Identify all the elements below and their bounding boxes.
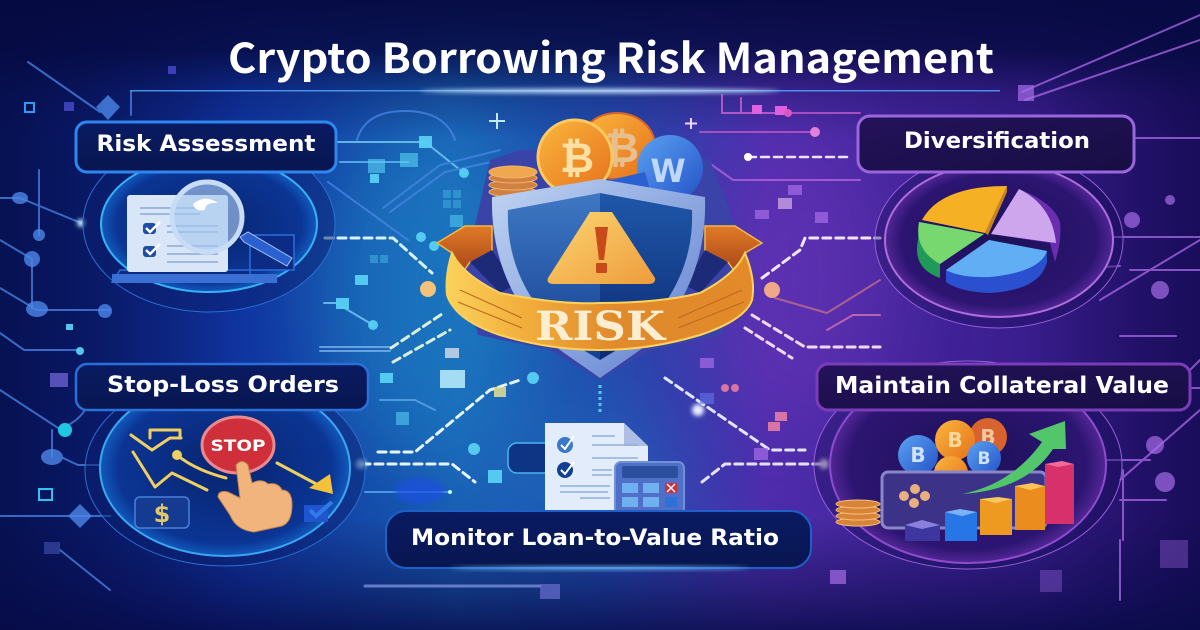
label: monitor loan-to-value ratio: [386, 511, 811, 570]
coins: ₿: [560, 133, 594, 182]
label: maintain collateral value: Maintain Collateral Value: [835, 373, 1169, 399]
panel: stop-loss orders: [76, 364, 368, 566]
icon: checklist and magnifier: [112, 182, 294, 283]
icon: stop button with hand and falling chart: [131, 417, 333, 532]
disc: stop-loss: [85, 374, 365, 566]
panel: risk assessment: [76, 122, 336, 312]
label: risk assessment: Risk Assessment: [96, 132, 316, 157]
icon: coins wallet and rising bars: B: [910, 443, 926, 467]
icon: coins wallet and rising bars: B: [978, 449, 990, 469]
disc: diversification: [875, 152, 1123, 328]
title underline glow: [130, 88, 1000, 94]
label: diversification: Diversification: [904, 129, 1090, 154]
label: stop-loss orders: [76, 364, 368, 410]
ribbon tails: [437, 226, 762, 293]
central emblem: risk shield: [437, 113, 762, 380]
icon: pie chart: [917, 186, 1060, 293]
icon: document and calculator: [508, 423, 684, 514]
ribbon band: [447, 253, 753, 350]
disc: risk assessment: [83, 136, 335, 312]
label: maintain collateral value: [817, 364, 1190, 410]
disc: maintain collateral: [814, 361, 1122, 569]
backing plate: [462, 150, 745, 380]
panel: diversification: [858, 116, 1134, 328]
label: risk assessment: [76, 122, 336, 172]
panel: monitor loan-to-value: [386, 423, 811, 570]
icon: stop button with hand and falling chart: $: [154, 500, 170, 528]
label: stop-loss orders: Stop-Loss Orders: [107, 373, 339, 398]
shield: [492, 179, 705, 378]
icon: coins wallet and rising bars: [836, 418, 1074, 541]
title: Crypto Borrowing Risk Management: [228, 25, 994, 85]
label: diversification: [858, 116, 1134, 172]
panel: maintain collateral value: [814, 361, 1190, 569]
icon: coins wallet and rising bars: B: [947, 428, 963, 452]
ribbon band: RISK: [535, 303, 666, 350]
icon: coins wallet and rising bars: B: [980, 425, 996, 449]
label: monitor loan-to-value ratio: Monitor Loan-to-Value Ratio: [411, 526, 779, 551]
coins: W: [650, 152, 686, 190]
coins: ₿: [605, 123, 639, 172]
coins: [489, 113, 703, 201]
warning triangle: [548, 212, 655, 284]
icon: stop button with hand and falling chart: STOP: [210, 436, 266, 455]
